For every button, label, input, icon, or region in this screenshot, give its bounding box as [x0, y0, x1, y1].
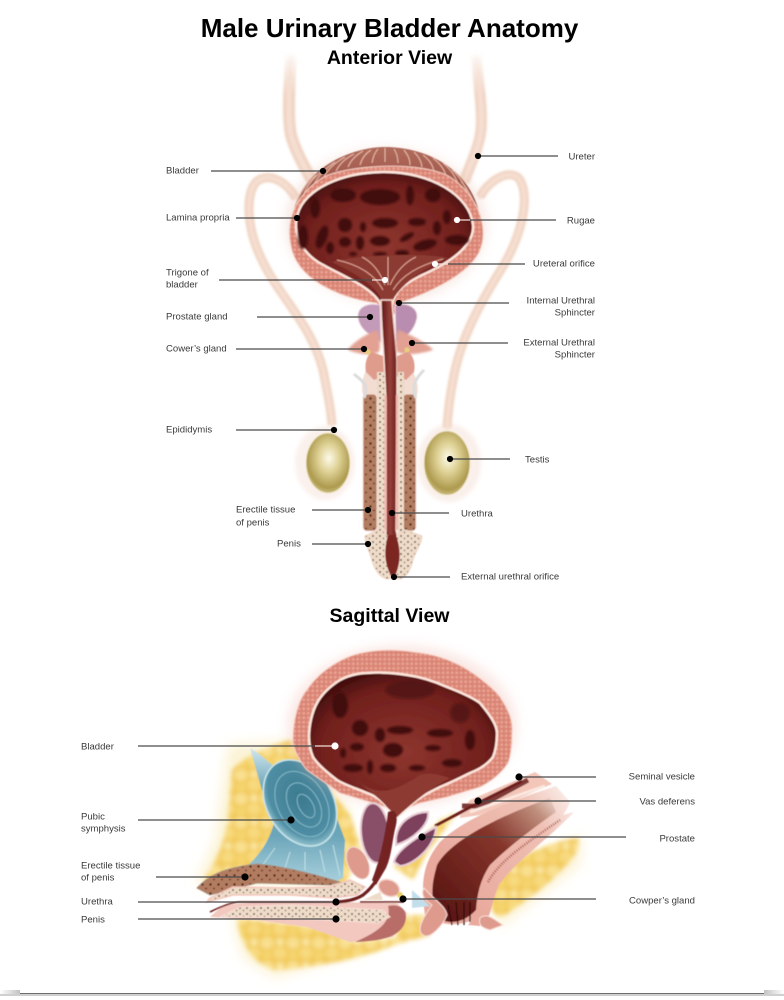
cowper's gland: [363, 876, 430, 908]
labels: anterior left: Cower’s gland: [166, 343, 227, 354]
page edge shadow: [0, 990, 784, 996]
erectile tissue: [363, 394, 377, 531]
bladder cavity with rugae: [309, 673, 497, 817]
labels: anterior right: External Urethral: [523, 337, 595, 348]
cowper's glands and external sphincter: [348, 330, 433, 354]
heading: anterior view: Anterior View: [327, 47, 453, 69]
labels: anterior right: Rugae: [567, 215, 595, 226]
labels: anterior left: [166, 165, 301, 549]
urethra: [381, 300, 399, 575]
illustration: sagittal view: [195, 646, 582, 978]
bladder halo: [288, 646, 516, 806]
labels: sagittal left: Pubic: [81, 811, 105, 822]
labels: sagittal right: Cowper’s gland: [629, 895, 695, 906]
seminal vesicle and vas deferens: [435, 772, 552, 826]
vas deferens: [249, 175, 524, 428]
labels: sagittal right: Vas deferens: [639, 796, 695, 807]
bladder wall: [293, 650, 512, 812]
title: Male Urinary Bladder Anatomy: [201, 13, 579, 43]
labels: anterior right: Testis: [525, 454, 550, 465]
bladder cavity with rugae: [296, 172, 473, 305]
labels: anterior left: Penis: [277, 538, 301, 549]
fat tissue: [203, 740, 579, 970]
labels: anterior left: Erectile tissue: [236, 504, 295, 515]
bladder halo: [286, 149, 486, 301]
labels: anterior right: Sphincter: [555, 307, 596, 318]
illustration: anterior view: [249, 52, 524, 579]
labels: sagittal left: symphysis: [81, 823, 126, 834]
labels: anterior right: [461, 151, 596, 582]
glans: [365, 530, 392, 579]
ureters: [289, 52, 481, 182]
labels: sagittal right: [629, 771, 695, 906]
trigone: [332, 255, 448, 304]
bladder muscle dome: [292, 147, 481, 222]
rectum: [420, 786, 574, 936]
pubic symphysis: [247, 747, 352, 882]
labels: sagittal left: Bladder: [81, 741, 115, 752]
labels: anterior right: Ureter: [568, 151, 596, 162]
labels: sagittal left: Penis: [81, 914, 105, 925]
labels: sagittal left: Urethra: [81, 896, 114, 907]
fat halo: [195, 740, 582, 978]
labels: anterior left: Bladder: [166, 165, 200, 176]
labels: anterior right: Ureteral orifice: [533, 258, 595, 269]
spongy tissue lower: [220, 905, 390, 923]
tissue folds: [354, 370, 424, 398]
labels: anterior left: Lamina propria: [166, 212, 230, 223]
labels: anterior left: Epididymis: [166, 424, 212, 435]
heading: sagittal view: Sagittal View: [330, 605, 450, 627]
labels: sagittal left: Erectile tissue: [81, 860, 140, 871]
labels: sagittal right: Prostate: [659, 833, 695, 844]
lower rectal wall: [468, 812, 574, 926]
labels: sagittal left: of penis: [81, 872, 115, 883]
leader lines and markers: anterior view: [211, 153, 558, 580]
labels: anterior right: Sphincter: [555, 349, 596, 360]
urethra: [210, 815, 403, 912]
labels: anterior right: Internal Urethral: [527, 295, 595, 306]
prostate gland: [358, 304, 417, 342]
lower penis body: [210, 902, 407, 942]
spongy tissue upper: [207, 880, 365, 902]
testes: [295, 424, 481, 502]
labels: sagittal left: [81, 741, 140, 925]
labels: anterior right: External urethral orifice: [461, 571, 559, 582]
bladder wall: [289, 166, 483, 314]
leader lines and markers: sagittal view: [138, 742, 626, 923]
labels: anterior left: bladder: [166, 279, 199, 290]
prostate lobes: [342, 802, 436, 883]
labels: sagittal right: Seminal vesicle: [629, 771, 695, 782]
labels: anterior right: Urethra: [461, 508, 494, 519]
labels: anterior left: Prostate gland: [166, 311, 228, 322]
labels: anterior left: Trigone of: [166, 267, 209, 278]
cowper's gland dots: [365, 347, 410, 355]
labels: anterior left: of penis: [236, 517, 270, 528]
erectile tissue upper: [197, 864, 340, 895]
glans tip: [355, 905, 406, 942]
penis shaft: [354, 352, 424, 579]
